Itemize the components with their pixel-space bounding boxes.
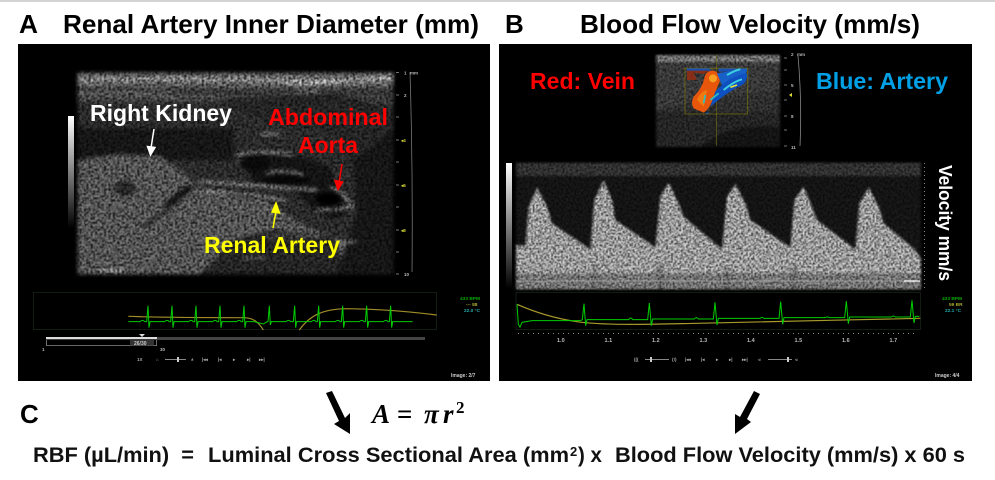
doppler waveform (516, 163, 924, 290)
arrow: area to formula (326, 391, 350, 434)
formula: area: π (424, 399, 440, 429)
depth scale B: 5 (791, 83, 794, 88)
vitals A (460, 296, 481, 314)
label: abdominal aorta: Abdominal (268, 104, 388, 130)
formula: area (370, 398, 464, 429)
label: right kidney: Right Kidney (90, 100, 232, 126)
heading: panel A: A (19, 9, 38, 39)
playback controls A: ▸▸| (258, 357, 265, 362)
depth scale A: ◂6 (400, 183, 406, 188)
time axis: 1.2 (652, 338, 660, 344)
playback controls A: |◂◂ (202, 357, 209, 362)
time axis: 1.4 (747, 338, 756, 344)
time axis (518, 334, 918, 344)
formula: RBF: RBF (µL/min) = (33, 443, 194, 467)
frame slider A: 30 (160, 347, 166, 352)
vitals B: 59 BR (949, 302, 963, 308)
formula: RBF: 2 (570, 444, 577, 459)
grayscale bar A (68, 116, 74, 228)
vitals B (942, 296, 963, 314)
vitals A: 433 BPM (460, 296, 480, 302)
label: artery: Blue: Artery (816, 68, 948, 94)
frame slider A: 26/30 (134, 341, 147, 347)
playback controls A: ▸ (232, 357, 236, 362)
arrow: white (148, 129, 155, 155)
depth scale B: 11 (791, 145, 796, 150)
ECG strip A (33, 292, 437, 330)
time axis: 1.5 (794, 338, 802, 344)
time axis: 1.7 (890, 338, 897, 344)
playback controls B: ▸▸| (741, 357, 748, 362)
playback controls A: |◂ (218, 357, 222, 362)
label: vein: Red: Vein (530, 68, 635, 94)
arrow: yellow (272, 203, 280, 228)
grayscale bar B (506, 163, 512, 289)
top rule (0, 0, 995, 2)
color doppler image (656, 55, 780, 147)
vitals B: 22.1 °C (945, 308, 962, 314)
formula: RBF: ) x (578, 443, 602, 467)
depth scale A: 2 (404, 93, 407, 98)
playback controls B: ((( (634, 357, 639, 362)
arrow: velocity to formula (735, 391, 760, 434)
image counter A: Image: 2/7 (451, 373, 476, 379)
formula: area: = (397, 399, 412, 429)
formula: area: r (443, 399, 454, 429)
heading: panel B: B (505, 9, 524, 39)
playback controls A: ± (191, 357, 194, 362)
playback controls A (137, 357, 265, 362)
image counter B: Image: 4/4 (935, 373, 960, 379)
formula: area: 2 (456, 398, 464, 417)
playback controls B: |◂◂ (685, 357, 692, 362)
frame slider A: 1 (42, 347, 45, 352)
formula: area: A (370, 399, 390, 429)
label: renal artery: Renal Artery (204, 232, 340, 258)
label: abdominal aorta: Aorta (298, 132, 359, 158)
depth scale A: mm (410, 70, 418, 76)
playback controls A: 1X (137, 357, 143, 362)
panel B: blood flow velocity (499, 44, 972, 381)
depth scale A: 1 (404, 70, 407, 76)
time axis: 1.0 (557, 338, 565, 344)
time axis: 1.1 (604, 338, 612, 344)
playback controls B: ▸ (715, 357, 719, 362)
playback controls B: |◂ (701, 357, 705, 362)
playback controls B: ◃ (757, 357, 761, 362)
depth scale A (396, 70, 418, 277)
playback controls B: (!) (672, 357, 677, 362)
formula: RBF: Luminal Cross Sectional Area (mm (208, 443, 569, 467)
depth scale B: 8 (791, 114, 794, 119)
playback controls B (634, 357, 798, 362)
depth scale B: mm (797, 52, 805, 57)
depth scale A: 10 (404, 272, 410, 277)
time axis: 1.6 (842, 338, 850, 344)
depth scale A: ◂4 (400, 138, 406, 143)
vitals B: 433 BPM (942, 296, 962, 302)
frame slider A (42, 334, 425, 352)
ultrasound image A (33, 70, 481, 379)
playback controls B: ◃ (794, 357, 798, 362)
playback controls A: ⌂ (156, 357, 159, 362)
time axis: 1.3 (700, 338, 707, 344)
playback controls B: ▸| (728, 357, 733, 362)
ECG strip B (516, 292, 920, 330)
heading: panel B: Blood Flow Velocity (mm/s) (580, 9, 920, 39)
depth scale B: 2 (791, 52, 794, 57)
vitals A: 22.0 °C (464, 308, 481, 314)
heading: panel C: C (20, 399, 39, 429)
formula: RBF (33, 443, 965, 467)
heading: panel A: Renal Artery Inner Diameter (mm) (63, 9, 479, 39)
depth scale A: ◂8 (400, 228, 406, 233)
label: velocity axis: Velocity mm/s (935, 165, 955, 281)
vitals A: --- 88 (466, 302, 478, 308)
formula: RBF: Blood Flow Velocity (mm/s) x 60 s (615, 443, 965, 467)
depth scale B (784, 52, 805, 150)
arrow: red (335, 164, 342, 190)
playback controls A: ▸| (246, 357, 251, 362)
label: abdominal aorta (268, 104, 388, 158)
